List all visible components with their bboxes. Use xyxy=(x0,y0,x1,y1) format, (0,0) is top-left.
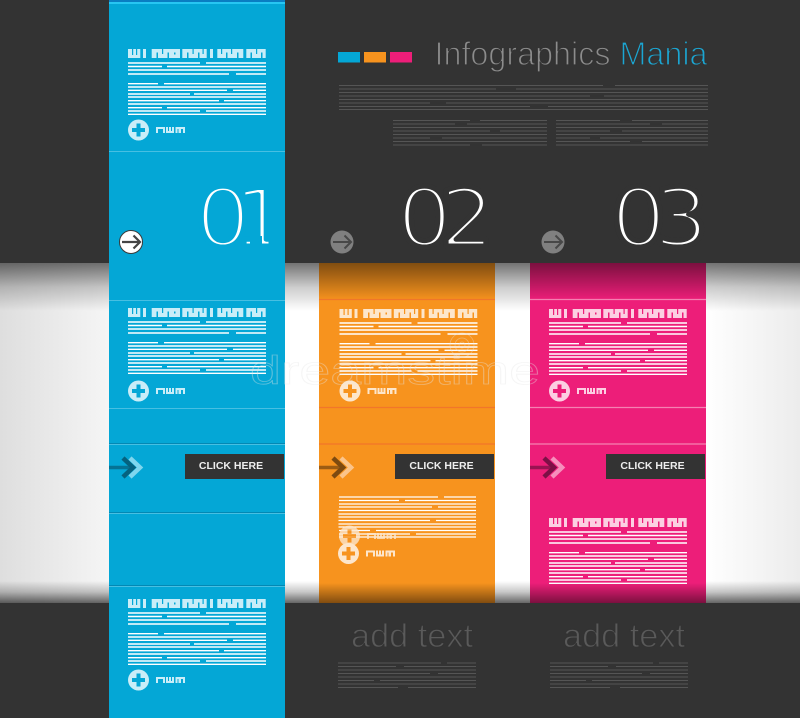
panel: orange column 02 xyxy=(319,263,495,603)
number 01: 01 xyxy=(196,172,288,265)
pink lower text block xyxy=(549,518,687,583)
icon: white circled arrow xyxy=(120,230,142,254)
pink bottom shade xyxy=(530,583,706,603)
orange top text block xyxy=(340,309,478,402)
button: click here xyxy=(185,454,284,479)
orange top shade xyxy=(319,263,495,300)
header intro text lines xyxy=(339,86,708,145)
orange arrow xyxy=(319,458,351,477)
blue top text block xyxy=(128,49,266,140)
white middle band xyxy=(0,263,800,603)
pink top shade xyxy=(530,263,706,300)
icon: faded plus xyxy=(339,526,396,546)
pink top text block xyxy=(549,309,687,402)
button: click here: CLICK HERE xyxy=(199,460,263,472)
watermark: dreamstime xyxy=(250,349,540,393)
orange lower text lines xyxy=(338,497,476,537)
panel: pink column 03 xyxy=(530,263,706,603)
panel: blue column 01 xyxy=(109,0,288,718)
number 03: 03 xyxy=(611,172,709,265)
blue arrow xyxy=(109,458,140,477)
button: click here: CLICK HERE xyxy=(409,460,474,472)
icon: plus with label xyxy=(338,543,395,564)
number 02: 02 xyxy=(397,172,495,265)
title: Infographics Mania xyxy=(434,35,708,72)
blue middle text block xyxy=(128,308,266,402)
blue bottom text block xyxy=(128,599,266,690)
icon: grey arrow 02 xyxy=(330,230,354,254)
legend colour swatches xyxy=(338,52,412,62)
pink arrow xyxy=(530,458,562,477)
button: click here: CLICK HERE xyxy=(620,460,685,472)
add text heading 03: add text xyxy=(563,617,685,654)
button: click here xyxy=(395,454,494,479)
icon: grey arrow 03 xyxy=(542,230,564,254)
footer text lines 03 xyxy=(550,663,688,688)
orange bottom shade xyxy=(319,583,495,603)
add text heading 02: add text xyxy=(351,617,473,654)
footer text lines 02 xyxy=(338,663,476,688)
button: click here xyxy=(606,454,705,479)
watermark xyxy=(250,333,540,393)
